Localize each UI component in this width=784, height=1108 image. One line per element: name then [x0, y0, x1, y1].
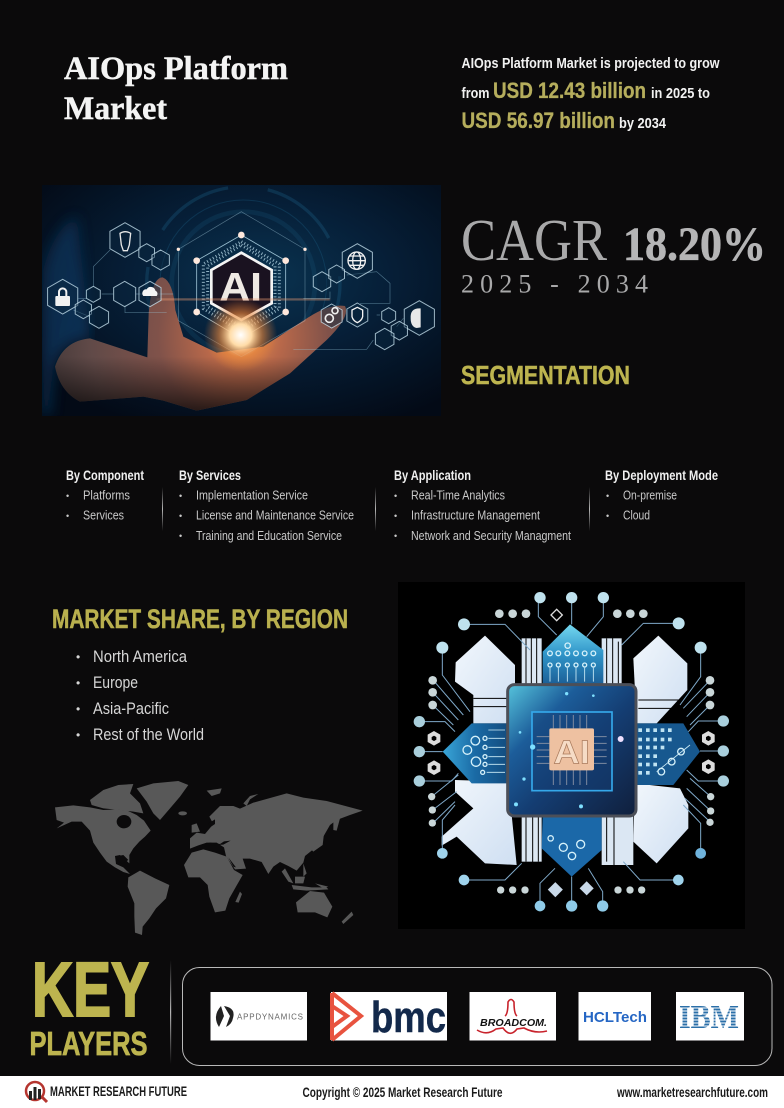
region list: [76, 647, 204, 744]
solder pads: [414, 592, 729, 912]
title: Market: [64, 91, 167, 127]
market growth summary: in 2025 to: [651, 85, 710, 102]
column: by application: •: [394, 511, 397, 521]
market growth summary: AIOps Platform Market is projected to grow: [462, 55, 720, 72]
column: by services: By Services: [179, 467, 241, 483]
column: by component: [66, 467, 144, 522]
concentric tech arcs: [145, 186, 342, 356]
logo: Broadcom: BROADCOM.: [480, 1017, 547, 1029]
world map: [55, 781, 363, 935]
column: by deployment mode: By Deployment Mode: [605, 467, 718, 483]
region list: North America: [93, 647, 187, 666]
segmentation heading: SEGMENTATION: [461, 362, 630, 390]
column: by component: •: [66, 511, 69, 521]
column: by services: Implementation Service: [196, 488, 308, 502]
key players heading: KEY: [32, 947, 149, 1033]
chip inner square: [532, 712, 612, 791]
region list: •: [76, 728, 80, 742]
hand: [55, 277, 346, 411]
column: by services: License and Maintenance Service: [196, 508, 354, 522]
column: by component: By Component: [66, 467, 144, 483]
segmentation columns: [66, 467, 718, 543]
logo: AppDynamics: APPDYNAMICS: [237, 1012, 303, 1022]
logo: bmc: [331, 992, 447, 1042]
right circuit panel: [636, 723, 700, 785]
column: by services: •: [179, 511, 182, 521]
column: by component: •: [66, 491, 69, 501]
sleeve of the arm: [42, 217, 90, 415]
region list: •: [76, 676, 80, 690]
footer logo: [26, 1082, 47, 1102]
column: by application: •: [394, 531, 397, 541]
logo: Broadcom: [470, 992, 556, 1040]
network hexagons: [48, 223, 434, 350]
market growth summary: from: [462, 85, 490, 102]
copyright: Copyright © 2025 Market Research Future: [302, 1085, 503, 1100]
title: [64, 51, 288, 127]
market growth summary: USD 56.97 billion: [462, 108, 615, 133]
column: by deployment mode: Cloud: [623, 508, 650, 522]
padlock icon: [55, 287, 70, 306]
logo: bmc: bmc: [371, 993, 446, 1042]
central chip: [508, 685, 636, 816]
glow in palm: [204, 298, 277, 372]
column: by application: [394, 467, 571, 543]
CAGR figure: 2025 - 2034: [461, 270, 648, 298]
dotted halo: [203, 242, 279, 332]
hero image: hand holding AI hexagon: [42, 185, 441, 416]
column: by deployment mode: [605, 467, 718, 522]
bottom circuit panel: [542, 816, 602, 877]
left circuit panel: [443, 723, 507, 783]
globe icon: [348, 252, 365, 269]
region list: •: [76, 702, 80, 716]
market share heading: MARKET SHARE, BY REGION: [52, 604, 348, 634]
AI tile: [549, 728, 594, 770]
vertical white traces: [522, 638, 633, 865]
region list: Rest of the World: [93, 725, 204, 744]
key players heading: [30, 947, 149, 1062]
column: by services: Training and Education Service: [196, 528, 342, 543]
AI hexagon: [211, 253, 272, 320]
glow points: [514, 692, 624, 808]
AI letters: AI: [219, 266, 262, 310]
brain icon: [411, 308, 421, 328]
region list: Asia-Pacific: [93, 699, 169, 718]
market growth summary: USD 12.43 billion: [493, 78, 646, 103]
CAGR figure: 18.20%: [623, 218, 766, 271]
column: by application: •: [394, 491, 397, 501]
key players panel: [182, 968, 772, 1066]
top circuit panel: [543, 624, 603, 684]
title: AIOps Platform: [64, 51, 288, 87]
connector lines: [73, 250, 403, 349]
chip pins: [537, 715, 607, 785]
column: by component: Platforms: [83, 488, 130, 502]
white octagon boards: [442, 636, 688, 865]
key players heading: PLAYERS: [30, 1025, 148, 1062]
market growth summary: [462, 55, 720, 133]
column: by deployment mode: •: [606, 511, 609, 521]
column: by application: Real-Time Analytics: [411, 488, 505, 502]
region list: •: [76, 650, 80, 664]
footer bar: [0, 1076, 784, 1108]
logo: AppDynamics: [210, 992, 307, 1040]
column: by deployment mode: On-premise: [623, 488, 677, 502]
column: by deployment mode: •: [606, 491, 609, 501]
bulb icon: [120, 232, 131, 251]
panel pads: [463, 643, 684, 860]
column: by services: [179, 467, 354, 543]
logo: IBM: IBM: [679, 999, 739, 1036]
hexagon frame around AI: [178, 212, 305, 357]
market growth summary: by 2034: [619, 115, 667, 132]
hand lower shading: [56, 360, 303, 410]
CAGR figure: [461, 207, 766, 298]
horizontal light flare: [157, 298, 330, 300]
chip illustration: [398, 582, 745, 929]
diamonds: [548, 881, 594, 897]
light nodes: [177, 232, 307, 315]
logo: HCLTech: HCLTech: [583, 1009, 647, 1026]
column: by services: •: [179, 491, 182, 501]
shield icon: [352, 307, 363, 323]
region list: Europe: [93, 673, 138, 692]
cloud icon: [142, 287, 158, 296]
company name: MARKET RESEARCH FUTURE: [50, 1083, 187, 1099]
column: by component: Services: [83, 508, 124, 522]
logo: HCLTech: [578, 992, 651, 1040]
column: by application: Network and Security Managment: [411, 528, 571, 543]
column: by application: Infrastructure Management: [411, 508, 540, 522]
circuit traces: [420, 598, 723, 906]
gears on fingertip: [325, 308, 338, 322]
column: by services: •: [179, 531, 182, 541]
column: by application: By Application: [394, 467, 471, 483]
CAGR figure: CAGR: [461, 207, 608, 273]
AI tile letters: AI: [553, 735, 590, 772]
small hexagon rings: [430, 609, 713, 773]
Hudson Bay and inland seas: [115, 815, 236, 867]
